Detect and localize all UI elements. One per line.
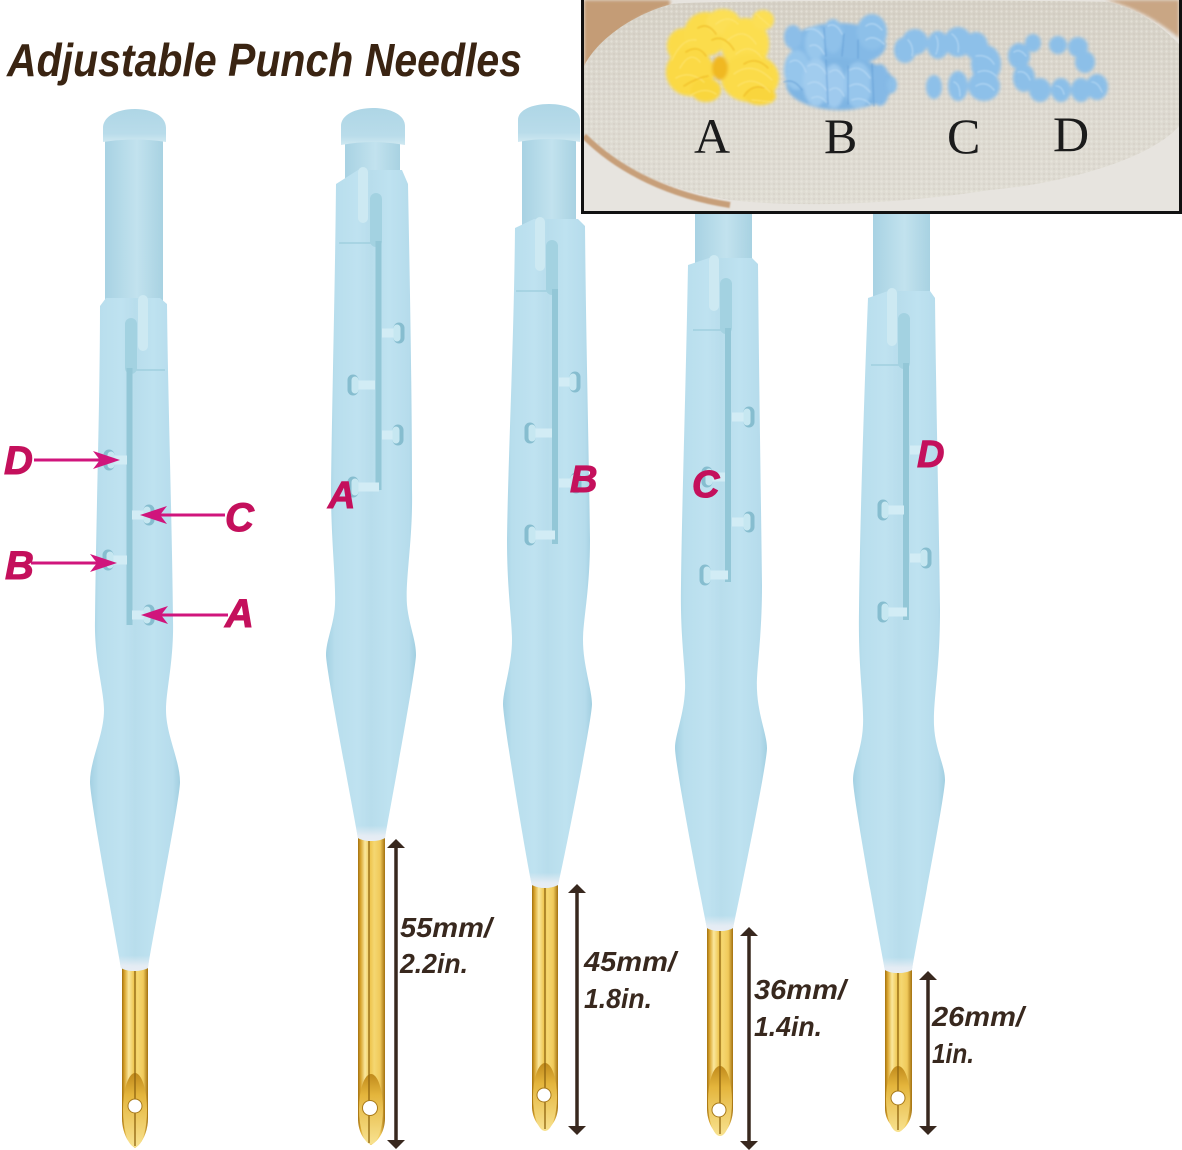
dimension 26mm bbox=[919, 971, 1027, 1135]
needle 3 bbox=[503, 104, 592, 1131]
needle 2 bbox=[326, 108, 416, 1145]
stitch letters: D bbox=[1053, 106, 1089, 162]
needle 5 slots bbox=[871, 293, 926, 620]
yarn A yellow bbox=[666, 9, 779, 105]
dimension 36mm bbox=[740, 927, 849, 1150]
labels on needles 2-5: C bbox=[692, 464, 720, 506]
needle 3 slots bbox=[516, 222, 576, 544]
labels on needle 1 bbox=[4, 439, 255, 636]
needle 1 tube and cap bbox=[103, 109, 166, 302]
arrow: D bbox=[34, 451, 120, 469]
dimension 55mm bbox=[387, 839, 495, 1149]
yarn D blue bbox=[1008, 34, 1108, 102]
dimension 55mm: 2.2in. bbox=[399, 948, 468, 979]
arrow: C bbox=[140, 506, 225, 524]
needle 3 handle bbox=[503, 219, 592, 888]
dimension 45mm: 45mm/ bbox=[583, 946, 679, 977]
needle 2 gold shaft bbox=[358, 836, 385, 1145]
stitch letters: C bbox=[947, 108, 980, 164]
yarn B blue bbox=[784, 14, 894, 110]
labels on needles 2-5 bbox=[327, 434, 944, 517]
inset photo: stitch lengths bbox=[582, 0, 1181, 213]
labels on needle 1: A bbox=[224, 592, 254, 636]
labels on needle 1: C bbox=[225, 496, 255, 540]
dimension 26mm: 26mm/ bbox=[931, 1001, 1027, 1032]
needle 5 bbox=[853, 212, 945, 1132]
needle 4 bbox=[675, 212, 767, 1136]
stitch letters: A bbox=[694, 108, 730, 164]
dimension 36mm: 1.4in. bbox=[754, 1011, 822, 1042]
needle 5 handle bbox=[853, 291, 945, 973]
arrow: A bbox=[141, 606, 228, 624]
needle 3 tube and cap bbox=[518, 104, 580, 230]
needle 1 gold shaft bbox=[122, 966, 148, 1148]
labels on needles 2-5: A bbox=[327, 475, 355, 517]
needle 1 handle bbox=[90, 298, 180, 971]
needle 4 tube bbox=[695, 212, 752, 267]
dimension 36mm: 36mm/ bbox=[754, 974, 849, 1005]
needle 4 gold shaft bbox=[707, 926, 733, 1136]
yarn C blue bbox=[887, 27, 1001, 101]
arrow: B bbox=[31, 554, 117, 572]
needle 5 tube bbox=[873, 212, 930, 302]
title: Adjustable Punch Needles bbox=[6, 34, 522, 86]
dimension 45mm bbox=[568, 884, 679, 1135]
dimension 45mm: 1.8in. bbox=[584, 983, 652, 1014]
stitch letters: B bbox=[824, 108, 857, 164]
labels on needles 2-5: D bbox=[917, 434, 944, 476]
dimension 55mm: 55mm/ bbox=[400, 912, 495, 943]
needle 4 handle bbox=[675, 258, 767, 931]
dimension 26mm: 1in. bbox=[932, 1038, 974, 1069]
needle 5 gold shaft bbox=[885, 968, 912, 1132]
labels on needles 2-5: B bbox=[570, 459, 597, 501]
needle 2 handle bbox=[326, 170, 416, 841]
labels on needle 1: B bbox=[5, 544, 34, 588]
stitch letters bbox=[694, 118, 1088, 154]
needle 4 slots bbox=[693, 260, 749, 582]
needle 1 bbox=[90, 109, 180, 1148]
needle 1 slots bbox=[108, 300, 165, 625]
labels on needle 1: D bbox=[4, 439, 33, 483]
needle 3 gold shaft bbox=[532, 883, 558, 1131]
needle 2 tube and cap bbox=[341, 108, 405, 190]
hoop and fabric bbox=[584, 0, 1179, 205]
needle 2 slots bbox=[339, 172, 399, 492]
